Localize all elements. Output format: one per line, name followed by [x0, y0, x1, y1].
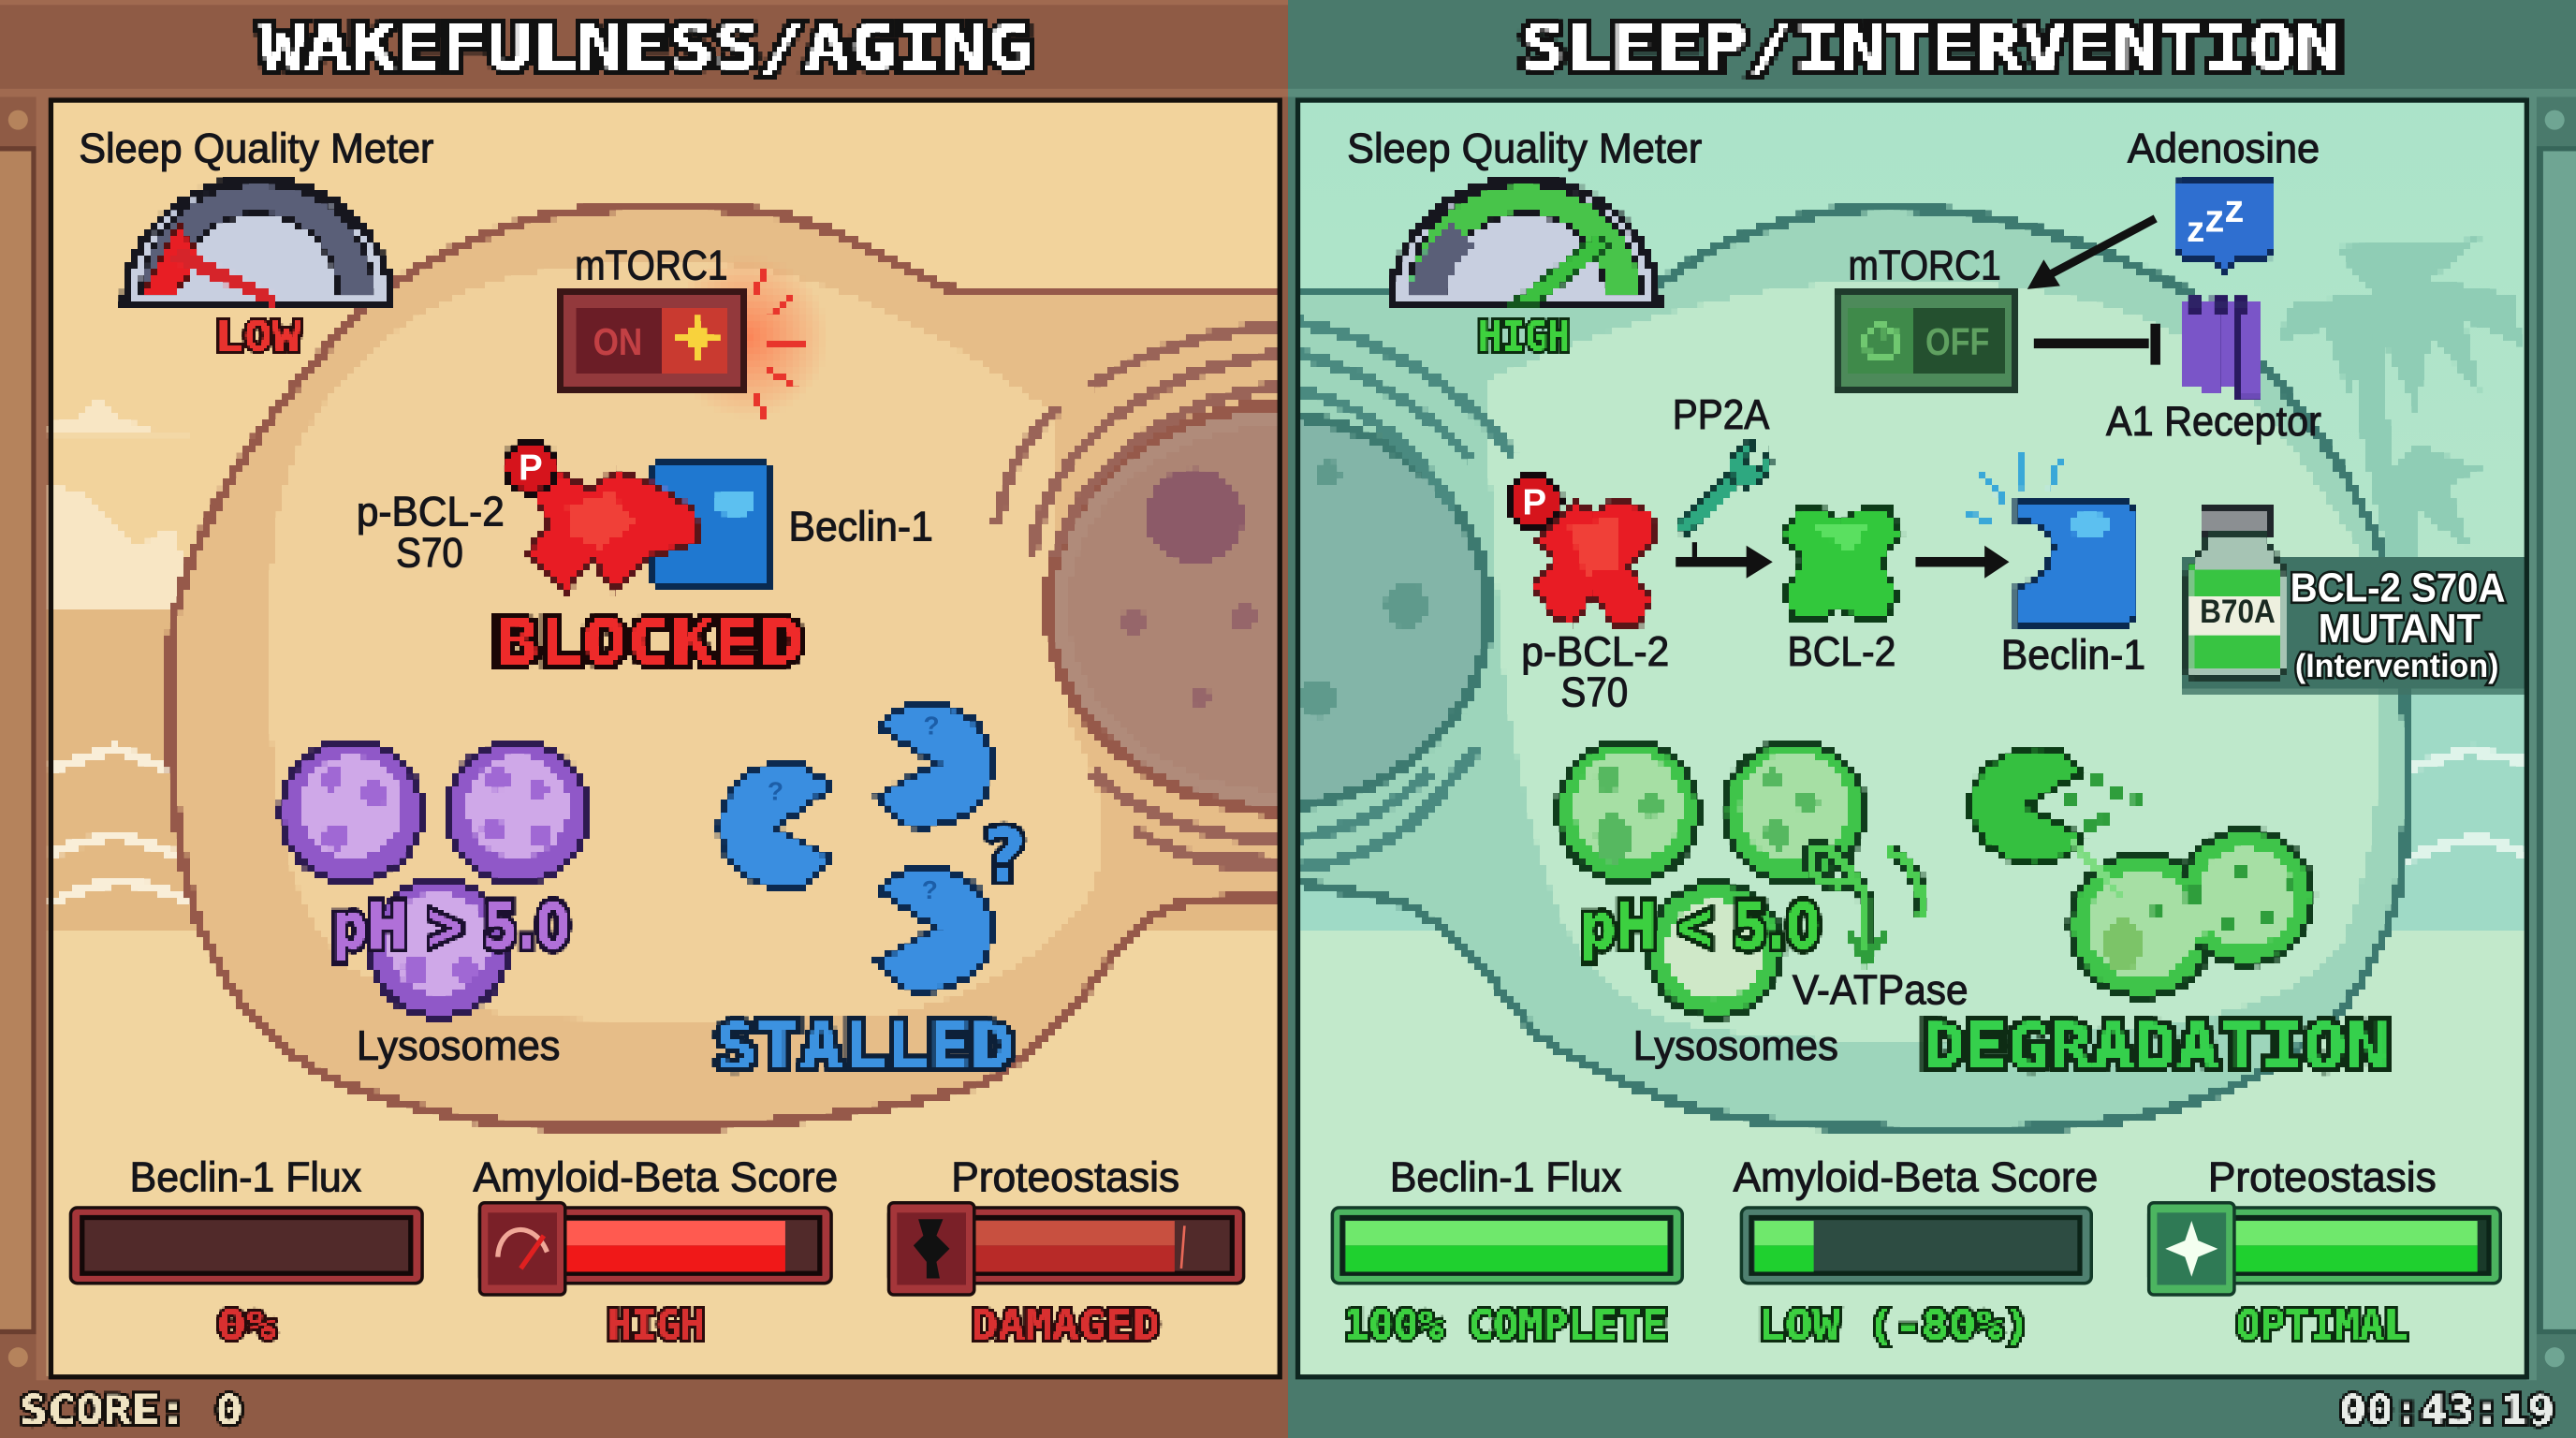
- label: mTORC1 right: mTORC1: [1848, 242, 2001, 288]
- gauge right: high: [1392, 179, 1658, 305]
- switch: mTORC1 off: [1832, 291, 2017, 391]
- switch text OFF: OFF: [1925, 320, 1989, 363]
- icon: B70A vial: [2187, 506, 2287, 677]
- lysosomes right: [1558, 741, 1865, 1017]
- value: OPTIMAL: OPTIMAL: [2236, 1301, 2408, 1349]
- question mark: ?: [984, 814, 1026, 899]
- icon: gauge small: [479, 1203, 565, 1295]
- bar: amyloid-beta left: [479, 1203, 831, 1295]
- pH label right: pH < 5.0: [1580, 890, 1821, 963]
- label: A1 receptor: A1 Receptor: [2106, 398, 2321, 445]
- small pixel style text: [20, 313, 2554, 1435]
- protein: Beclin-1 notch: [2017, 503, 2136, 626]
- panel: sleep artwork: [1042, 179, 2526, 1377]
- score: SCORE: 0: [20, 1387, 243, 1435]
- text labels: [79, 125, 2506, 1200]
- endoplasmic reticulum right: [1296, 322, 1515, 868]
- zzz: z: [2187, 210, 2204, 250]
- lysosomes left: [281, 741, 588, 1017]
- pac marks: ?: [922, 875, 938, 904]
- icon: V-ATPase pump arrows: [1810, 847, 1922, 961]
- badge P left: P: [519, 448, 543, 488]
- inhibition bar to receptor: [2034, 324, 2160, 365]
- cell body left: [169, 207, 1298, 1128]
- protein: p-BCL-2 red: [1508, 475, 1656, 624]
- label: sleep quality meter left: Sleep Quality Meter: [79, 125, 433, 172]
- value: LOW (-80%): LOW (-80%): [1758, 1301, 2030, 1349]
- protein: BCL-2 green: [1782, 507, 1901, 621]
- status: DEGRADATION: DEGRADATION: [1922, 1010, 2389, 1083]
- icon: cracked block: [889, 1203, 974, 1295]
- status: HIGH: HIGH: [1479, 313, 1571, 360]
- label: BCL-2: BCL-2: [1788, 628, 1895, 675]
- panel border right: [1298, 100, 2526, 1377]
- zzz: z: [2224, 186, 2244, 230]
- intervention label: MUTANT: [2318, 606, 2481, 652]
- status: LOW: LOW: [215, 313, 301, 360]
- intervention label: (Intervention): [2295, 648, 2499, 684]
- label: lysosomes left: Lysosomes: [357, 1022, 560, 1069]
- bar: proteostasis right: [2149, 1203, 2500, 1295]
- value: DAMAGED: DAMAGED: [971, 1301, 1160, 1349]
- pac-man autophagosome eating: [1969, 748, 2144, 896]
- fused autolysosome: [2070, 829, 2313, 997]
- label: amyloid right: Amyloid-Beta Score: [1734, 1153, 2098, 1200]
- status: BLOCKED: BLOCKED: [494, 606, 803, 679]
- label: adenosine: Adenosine: [2128, 125, 2320, 172]
- title right: SLEEP/INTERVENTION: [1519, 11, 2341, 84]
- label: mTORC1 left: mTORC1: [575, 242, 728, 288]
- icon: PP2A wrench: [1686, 443, 1771, 526]
- icon: sparkle: [2149, 1203, 2234, 1295]
- label: amyloid left: Amyloid-Beta Score: [473, 1153, 838, 1200]
- arrow: p-BCL-2 to BCL-2: [1676, 542, 1773, 579]
- switch text ON: ON: [593, 320, 642, 363]
- zzz: z: [2204, 196, 2224, 240]
- label: lysosomes right: Lysosomes: [1633, 1022, 1838, 1069]
- label: p-BCL-2 left: p-BCL-2: [357, 489, 505, 536]
- value: 100% COMPLETE: 100% COMPLETE: [1344, 1301, 1667, 1349]
- status: STALLED: STALLED: [714, 1010, 1014, 1083]
- value: HIGH: HIGH: [607, 1301, 705, 1349]
- pac marks: ?: [924, 712, 940, 741]
- arrow: BCL-2 to Beclin-1: [1915, 546, 2009, 579]
- pH label left: pH > 5.0: [332, 890, 570, 963]
- intervention label: [2291, 565, 2506, 684]
- label: S70 left: S70: [396, 530, 463, 577]
- label: sleep quality meter right: Sleep Quality Meter: [1347, 125, 1702, 172]
- large pixel style text: [259, 11, 2389, 1083]
- panel: wakefulness artwork: [47, 177, 1278, 1376]
- value: 0%: 0%: [217, 1301, 277, 1349]
- label: proteostasis right: Proteostasis: [2208, 1153, 2437, 1200]
- bar: proteostasis left: [889, 1203, 1244, 1295]
- pac marks: [768, 712, 940, 904]
- switch: mTORC1 on: [559, 291, 744, 391]
- nucleus left: [1042, 400, 1278, 819]
- pac-man autophagosomes stalled: [720, 703, 992, 991]
- beach scene right: [1296, 611, 2526, 1377]
- label: beclin flux right: Beclin-1 Flux: [1390, 1153, 1621, 1200]
- vial label: B70A: [2200, 594, 2276, 630]
- label: p-BCL-2 right: p-BCL-2: [1521, 628, 1669, 675]
- title left: WAKEFULNESS/AGING: [259, 11, 1032, 84]
- endoplasmic reticulum left: [997, 326, 1288, 868]
- rays near Beclin-1: [1965, 452, 2060, 521]
- label: proteostasis left: Proteostasis: [951, 1153, 1179, 1200]
- complex: p-BCL-2 and Beclin-1: [505, 440, 772, 592]
- nucleus right: [1042, 414, 1488, 809]
- icon: adenosine sleep bubble: [2175, 179, 2274, 272]
- badge P right: P: [1522, 482, 1546, 522]
- gauge left: low: [124, 179, 391, 305]
- status bars: [70, 1203, 2500, 1295]
- icon: A1 receptor: [2184, 296, 2261, 398]
- label: V-ATPase: V-ATPase: [1793, 966, 1969, 1013]
- palm trees: [2277, 238, 2522, 616]
- panel border left: [51, 100, 1280, 1377]
- intervention label box: [2180, 557, 2526, 692]
- label: beclin flux left: Beclin-1 Flux: [130, 1153, 361, 1200]
- bar: Beclin-1 flux right: [1332, 1208, 1682, 1284]
- label: Beclin-1 left: Beclin-1: [788, 503, 933, 550]
- arrow: adenosine to mTORC1: [2027, 218, 2156, 289]
- bar: amyloid-beta right: [1741, 1208, 2091, 1284]
- timer: 00:43:19: [2339, 1387, 2554, 1435]
- pac marks: ?: [768, 777, 783, 806]
- cell body right: [1281, 208, 2408, 1130]
- glow and rays: [695, 268, 819, 419]
- intervention label: BCL-2 S70A: [2291, 565, 2506, 610]
- label: PP2A: PP2A: [1673, 391, 1769, 438]
- label: Beclin-1 right: Beclin-1: [2001, 631, 2145, 678]
- beach scene left: [50, 394, 1280, 1377]
- bar: Beclin-1 flux left: [70, 1208, 422, 1284]
- label: S70 right: S70: [1560, 669, 1628, 716]
